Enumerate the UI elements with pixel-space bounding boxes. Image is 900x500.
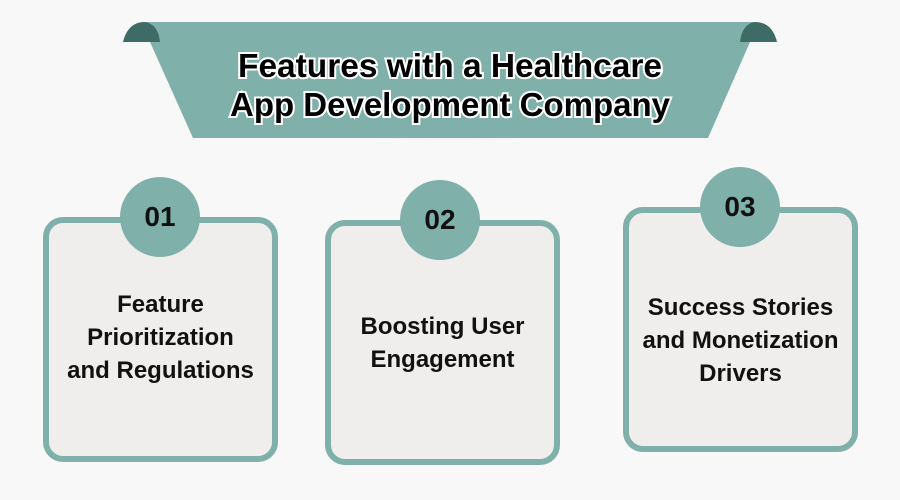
card 3: [623, 207, 858, 452]
badge 03: 03: [724, 191, 756, 222]
card 1 text: and Regulations: [67, 357, 254, 384]
title banner: [123, 22, 777, 138]
title banner: Features with a Healthcare: [238, 47, 662, 84]
card 1 text: Feature: [117, 291, 204, 318]
badge 03: [700, 167, 780, 247]
card 2 text: [360, 313, 524, 373]
badge 02: [400, 180, 480, 260]
title banner: App Development Company: [230, 86, 671, 123]
card 1 text: [67, 291, 254, 384]
card 2: [325, 220, 560, 465]
card 3 text: Success Stories: [648, 294, 833, 321]
badge 01: [120, 177, 200, 257]
card 1: [43, 217, 278, 462]
card 3 text: [642, 294, 838, 387]
badge 01: 01: [144, 201, 176, 232]
card 2 text: Engagement: [370, 346, 515, 373]
card 3 text: Drivers: [699, 360, 782, 387]
card 1 text: Prioritization: [87, 324, 234, 351]
badge 02: 02: [424, 204, 456, 235]
card 3 text: and Monetization: [642, 327, 838, 354]
card 2 text: Boosting User: [360, 313, 524, 340]
